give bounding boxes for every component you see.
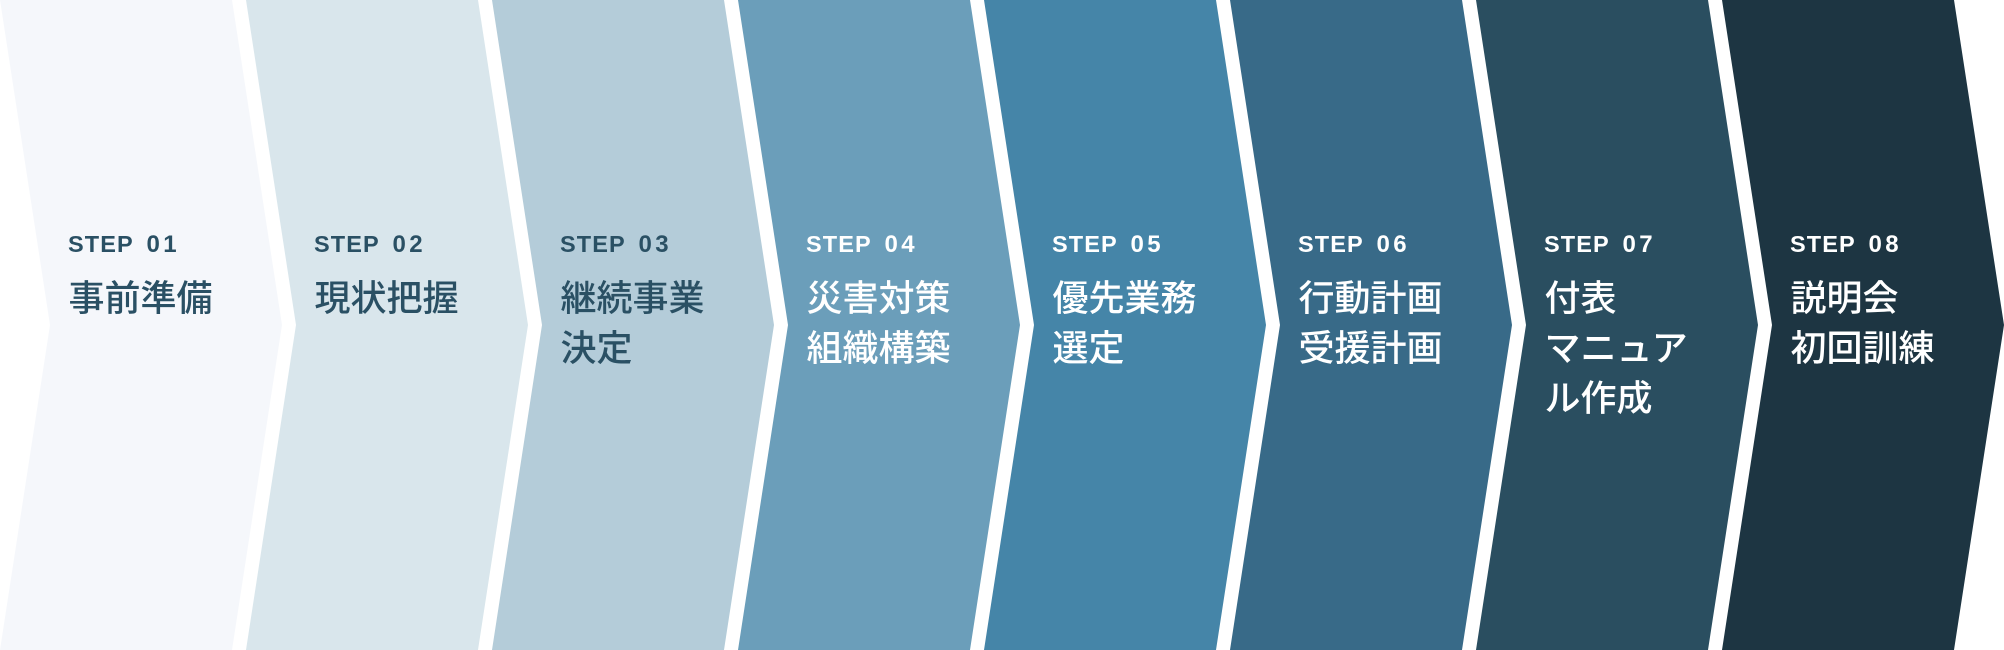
label: step 08: 08 [1868, 231, 1902, 258]
title: step 03: 継続事業 [560, 278, 705, 318]
title: step 04: 組織構築 [806, 328, 951, 368]
title: step 06: 受援計画 [1298, 328, 1443, 368]
title: step 08: 説明会 [1790, 278, 1899, 318]
label: step 03: STEP [560, 231, 626, 257]
title: step 07: マニュア [1544, 328, 1688, 368]
label: step 05: STEP [1052, 231, 1118, 257]
step 2: current state [246, 0, 528, 650]
label: step 02: STEP [314, 231, 380, 257]
step 1: preparation [0, 0, 282, 650]
title: step 05: 選定 [1052, 328, 1125, 368]
label: step 01: 01 [146, 231, 180, 258]
title: step 02: 現状把握 [314, 278, 459, 318]
step 7: appendix and manual [1476, 0, 1758, 650]
label: step 07: 07 [1622, 231, 1656, 258]
step 3: continuity [492, 0, 774, 650]
title: step 06: 行動計画 [1298, 278, 1443, 318]
label: step 01: STEP [68, 231, 134, 257]
step 6: action plan [1230, 0, 1512, 650]
label: step 04: 04 [884, 231, 918, 258]
title: step 07: ル作成 [1544, 378, 1653, 418]
title: step 01: 事前準備 [68, 278, 213, 318]
step 8: briefing and training [1722, 0, 2004, 650]
title: step 04: 災害対策 [806, 278, 951, 318]
label: step 08: STEP [1790, 231, 1856, 257]
step 5: priority work [984, 0, 1266, 650]
label: step 02: 02 [392, 231, 426, 258]
title: step 05: 優先業務 [1052, 278, 1197, 318]
label: step 06: 06 [1376, 231, 1410, 258]
label: step 06: STEP [1298, 231, 1364, 257]
title: step 07: 付表 [1544, 278, 1617, 318]
title: step 08: 初回訓練 [1790, 328, 1935, 368]
title: step 03: 決定 [560, 328, 633, 368]
label: step 05: 05 [1130, 231, 1164, 258]
label: step 04: STEP [806, 231, 872, 257]
step 4: disaster organization [738, 0, 1020, 650]
label: step 07: STEP [1544, 231, 1610, 257]
label: step 03: 03 [638, 231, 672, 258]
